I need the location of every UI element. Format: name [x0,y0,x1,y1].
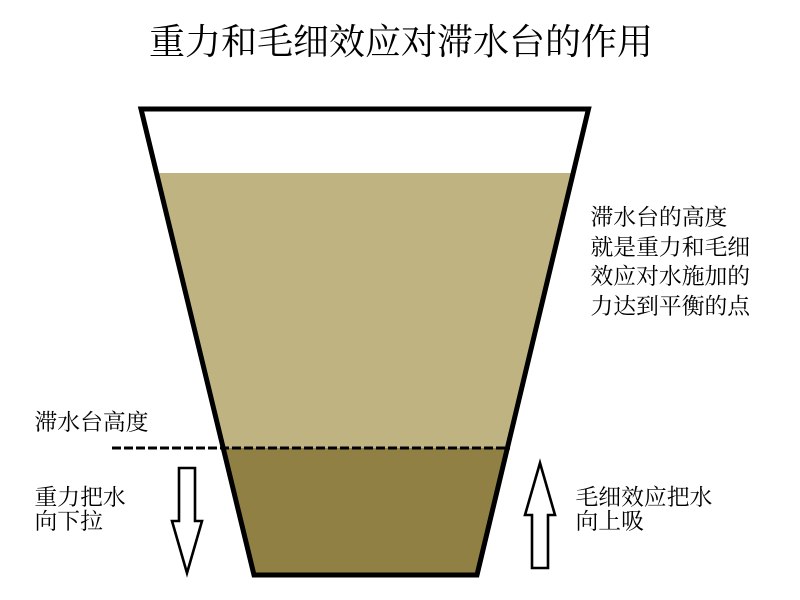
arrow: gravity down [172,468,202,573]
container: perched water diagram [141,109,588,575]
label: gravity pulls water down: 重力把水 [34,485,126,510]
explanation text: 滞水台的高度 [590,205,727,230]
label: capillary action draws water up: 毛细效应把水 [576,485,712,510]
perched water table level line [112,446,510,450]
label: capillary action draws water up: 向上吸 [576,509,644,534]
water: perched water table [223,448,506,575]
container outline [141,109,588,575]
explanation text: 力达到平衡的点 [590,294,751,319]
label: gravity pulls water down: 向下拉 [34,509,103,534]
arrow: capillary up [525,463,555,568]
explanation text: 效应对水施加的 [590,264,750,289]
water: upper layer [157,173,573,448]
title: 重力和毛细效应对滞水台的作用 [149,22,653,62]
label: perched water height: 滞水台高度 [34,410,149,435]
explanation text: 就是重力和毛细 [590,235,750,260]
